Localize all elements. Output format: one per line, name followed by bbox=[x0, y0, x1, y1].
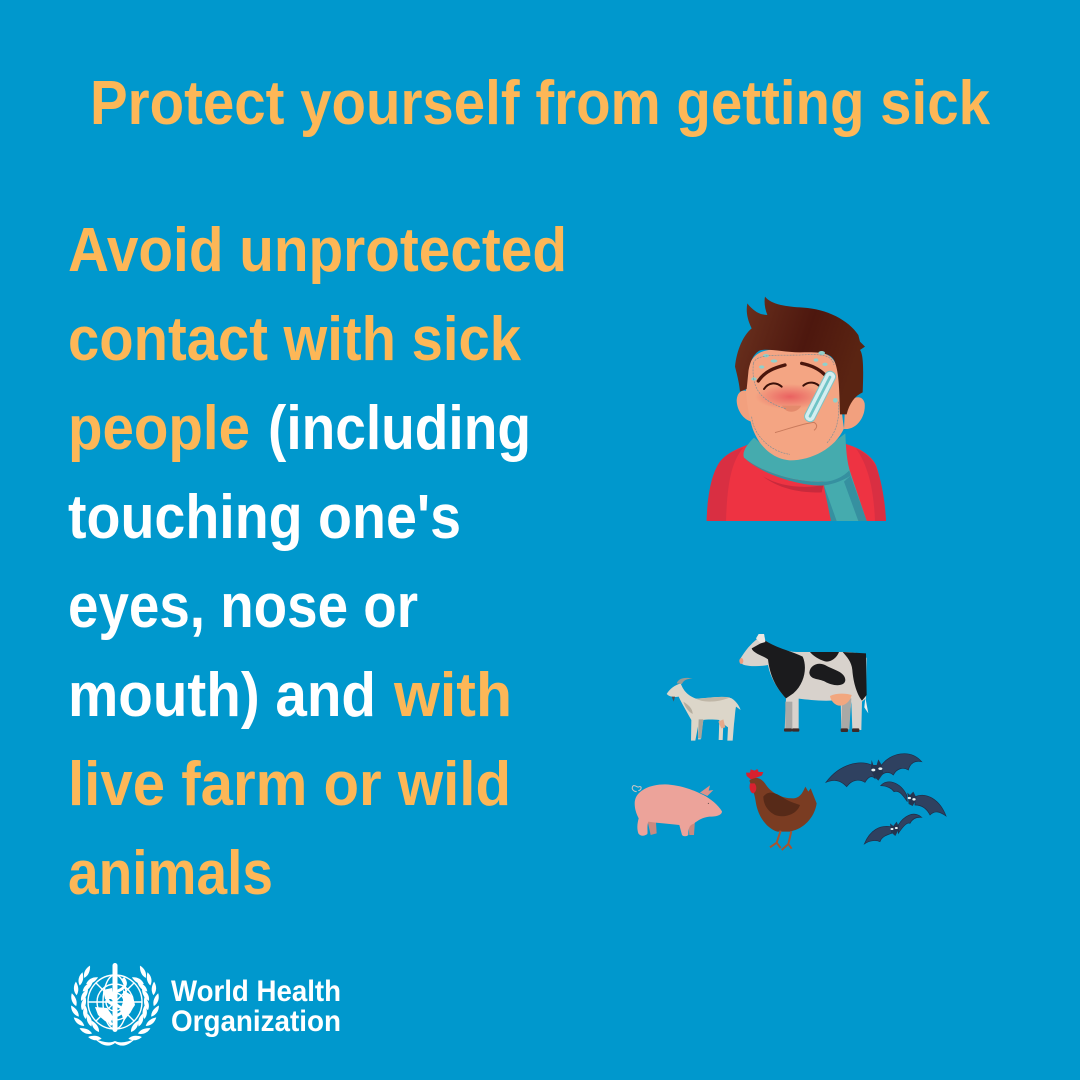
logo: World Health Organization: Organization bbox=[171, 1005, 341, 1038]
face bbox=[746, 349, 844, 460]
main message text bbox=[68, 216, 567, 908]
icon: cow bbox=[739, 634, 868, 732]
bat two bbox=[881, 782, 946, 816]
sweat drops bbox=[751, 351, 838, 403]
icon: sick man with thermometer bbox=[707, 297, 886, 521]
bat three bbox=[864, 814, 922, 844]
scarf bbox=[743, 433, 867, 521]
eyebrows bbox=[758, 365, 785, 381]
logo wordmark: World Health bbox=[171, 975, 341, 1008]
icons: farm and wild animals bbox=[632, 634, 946, 850]
thermometer bbox=[803, 370, 837, 423]
hair bbox=[735, 297, 865, 414]
main message text: live farm or wild bbox=[68, 750, 511, 819]
eyes bbox=[764, 383, 782, 389]
title: Protect yourself from getting sick bbox=[90, 69, 990, 138]
continents bbox=[95, 988, 135, 1024]
main message text: touching one's bbox=[68, 483, 461, 552]
main message text: animals bbox=[68, 839, 273, 908]
icon: goat bbox=[667, 678, 741, 741]
nose bbox=[782, 406, 801, 412]
logo: World Health Organization bbox=[68, 963, 341, 1046]
main message text: Avoid unprotected bbox=[68, 216, 567, 285]
main message text: eyes, nose or bbox=[68, 572, 418, 641]
staff and serpent bbox=[112, 963, 118, 1032]
main message text: mouth) and bbox=[68, 661, 376, 730]
main message text: (including bbox=[268, 394, 531, 463]
main message text: contact with sick bbox=[68, 305, 521, 374]
icon: pig bbox=[632, 784, 722, 836]
icon: WHO emblem bbox=[68, 963, 162, 1046]
laurel bbox=[68, 965, 102, 1042]
icon: rooster bbox=[746, 769, 817, 850]
bat one bbox=[826, 754, 922, 787]
main message text: with bbox=[393, 661, 512, 730]
icon: bats bbox=[826, 754, 946, 844]
sick dashed outline bbox=[752, 355, 839, 454]
blush bbox=[755, 384, 825, 409]
shirt bbox=[707, 442, 886, 521]
main message text: people bbox=[68, 394, 250, 463]
mouth and hand line bbox=[775, 422, 817, 433]
ears bbox=[737, 391, 752, 422]
